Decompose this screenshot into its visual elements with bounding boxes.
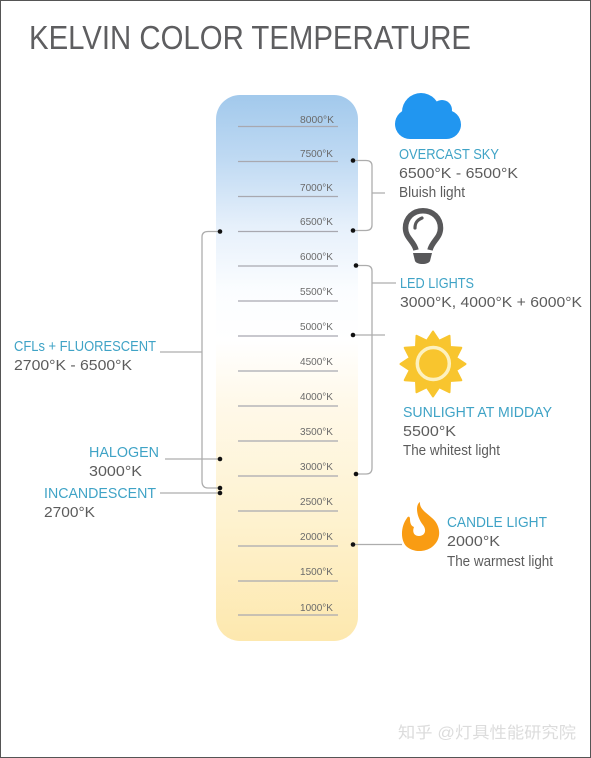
text block: halogen [89,444,159,480]
text block: incandescent: INCANDESCENT [44,485,156,502]
scale labels: 2500°K [300,496,333,508]
scale labels: 6000°K [300,251,333,263]
text block: CFLs + fluorescent [14,338,156,374]
scale labels [300,114,334,614]
text block: candle light: The warmest light [447,554,553,570]
text block: candle light: 2000°K [447,534,500,550]
text block: CFLs + fluorescent: 2700°K - 6500°K [14,358,132,374]
text block: CFLs + fluorescent: CFLs + FLUORESCENT [14,338,156,355]
text block: candle light [447,514,553,570]
scale labels: 1500°K [300,566,333,578]
icon: light bulb [406,211,440,264]
connector: incandescent [160,491,222,495]
text block: overcast sky: Bluish light [399,185,465,201]
connector: halogen [165,457,222,461]
text block: candle light: CANDLE LIGHT [447,514,547,531]
icon: sun [400,332,466,396]
scale labels: 5500°K [300,286,333,298]
text block: halogen: HALOGEN [89,444,159,461]
scale labels: 6500°K [300,216,333,228]
text block: overcast sky: OVERCAST SKY [399,146,499,163]
bracket: CFLs and fluorescent [160,229,222,490]
scale labels: 5000°K [300,321,333,333]
text block: sunlight at midday: 5500°K [403,424,456,440]
text block: incandescent: 2700°K [44,505,95,521]
scale labels: 2000°K [300,531,333,543]
scale labels: 7000°K [300,182,333,194]
bracket: LED lights [351,263,396,476]
icon: flame [402,502,439,551]
scale labels: 8000°K [300,114,334,126]
scale labels: 3000°K [300,461,333,473]
temperature scale bar [216,95,358,641]
text block: halogen: 3000°K [89,464,142,480]
text block: sunlight at midday: The whitest light [403,443,500,459]
scale labels: 7500°K [300,148,333,160]
text block: sunlight at midday: SUNLIGHT AT MIDDAY [403,404,552,421]
scale labels: 3500°K [300,426,333,438]
scale labels: 1000°K [300,602,333,614]
watermark: 知乎 @灯具性能研究院 [398,724,576,742]
text block: LED lights: LED LIGHTS [400,275,474,292]
scale labels: 4500°K [300,356,333,368]
scale labels: 4000°K [300,391,333,403]
text block: overcast sky: 6500°K - 6500°K [399,166,518,182]
scale lines [238,126,338,615]
bracket: overcast sky [351,158,385,233]
text block: LED lights [400,275,582,311]
connector: candle light [351,542,402,547]
text block: overcast sky [399,146,518,201]
title: KELVIN COLOR TEMPERATURE [29,19,471,56]
text block: incandescent [44,485,156,521]
text block: sunlight at midday [403,404,552,459]
icon: cloud [395,93,461,139]
text block: LED lights: 3000°K, 4000°K + 6000°K [400,295,582,311]
